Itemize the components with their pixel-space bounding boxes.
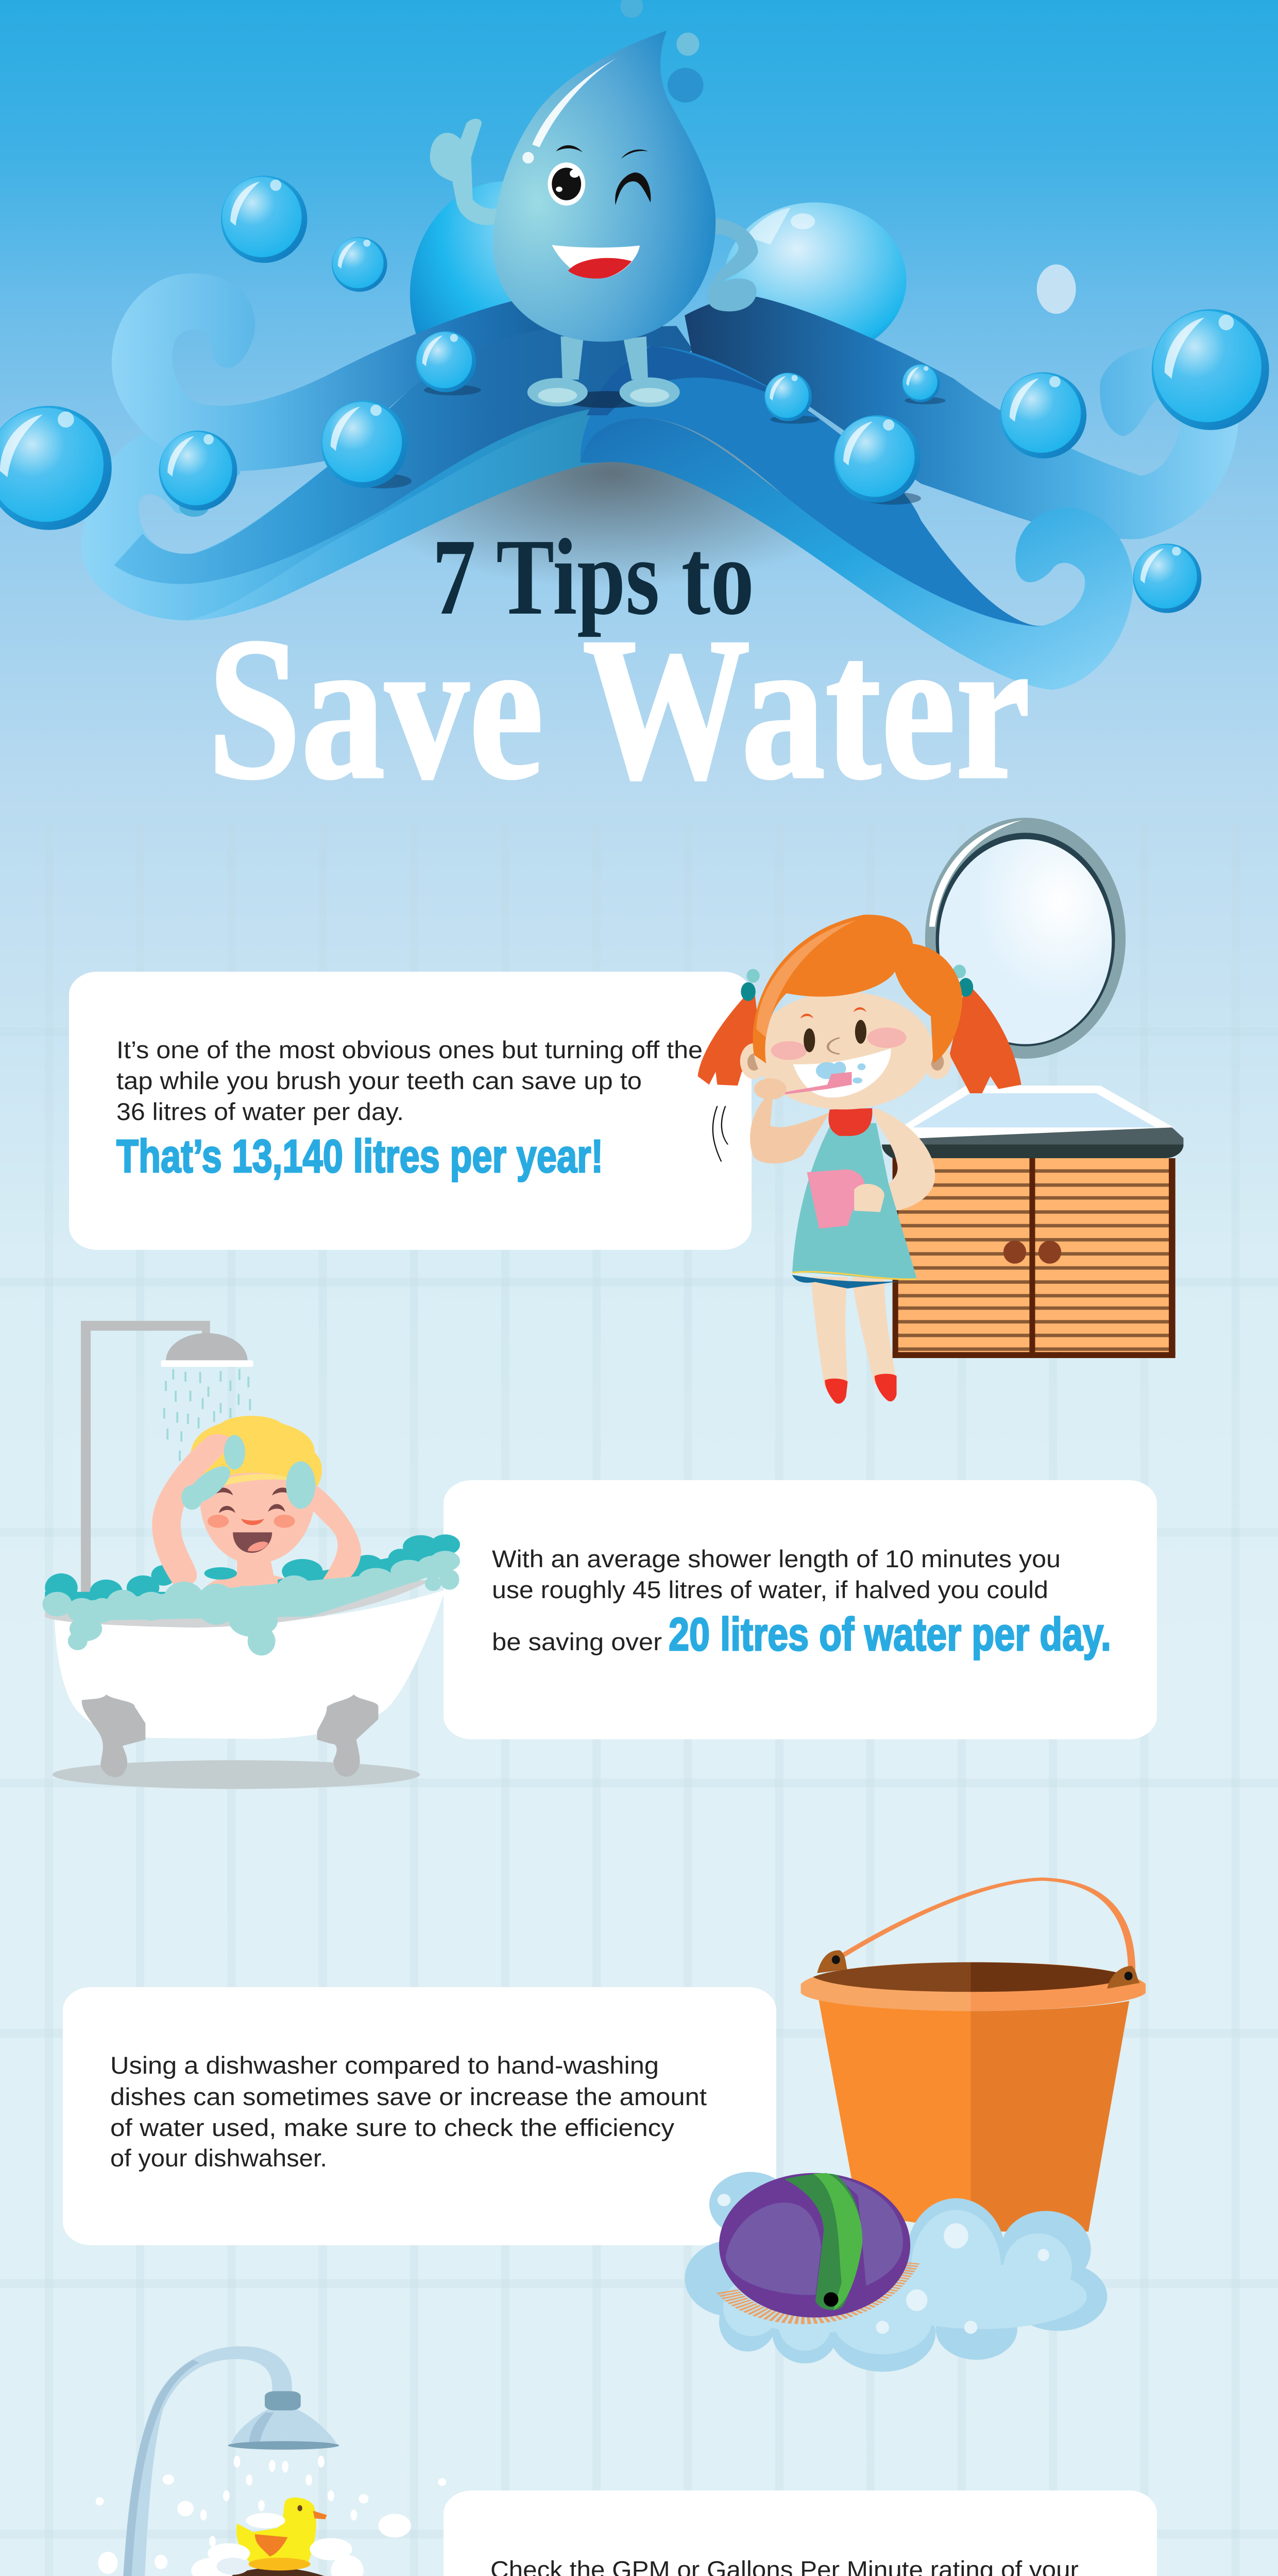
handle lug left — [817, 1950, 847, 1973]
left arm — [750, 1093, 830, 1163]
brush panels — [726, 2177, 903, 2295]
text: tip one: tap while you brush your teeth can save up to — [116, 1067, 642, 1094]
shower pipe and head — [81, 1321, 253, 1600]
dress — [792, 1123, 917, 1280]
curved shower pipe — [117, 2346, 292, 2576]
wall tiles — [0, 824, 1278, 2576]
bubbles — [0, 176, 1269, 613]
panel: card two — [444, 1480, 1157, 1739]
right arm — [854, 1108, 935, 1212]
hair — [202, 2568, 360, 2576]
foam — [685, 2172, 1107, 2372]
eyes and brows — [800, 1007, 866, 1052]
cabinet — [893, 1158, 1175, 1358]
handle lug right — [1107, 1966, 1140, 1989]
text: tip two: be saving over — [492, 1628, 662, 1655]
mouth — [552, 245, 640, 279]
scrubbing brush — [719, 2173, 910, 2319]
panel: card three — [63, 1987, 776, 2245]
left arm thumbs up — [430, 119, 501, 225]
shoes — [825, 1374, 897, 1404]
teeth and foam — [793, 1048, 891, 1097]
title line one: 7 Tips to — [432, 516, 754, 637]
bucket rim — [801, 1962, 1146, 2011]
bath feet — [82, 1694, 378, 1777]
boy — [191, 2568, 369, 2576]
shadow — [53, 1760, 420, 1789]
text: tip two: With an average shower length of 10 minutes you — [492, 1545, 1061, 1572]
girl — [697, 914, 1021, 1404]
big back bubbles — [410, 181, 907, 408]
hand on brush — [754, 1078, 787, 1099]
cheeks — [208, 1515, 295, 1528]
hero illustration: water drop on waves — [0, 0, 1269, 690]
text: tip one: 36 litres of water per day. — [116, 1098, 404, 1125]
front mid wave — [580, 346, 1043, 626]
illustration: child washing hair in tub — [42, 1321, 460, 1789]
upper left wave — [112, 274, 571, 471]
illustration: mirror, sink cabinet and girl brushing teeth — [697, 818, 1183, 1404]
text: tip two — [492, 1545, 1111, 1660]
bucket body — [819, 2000, 1129, 2231]
legs and feet — [527, 336, 680, 407]
text: tip three — [110, 2052, 707, 2172]
left eye — [548, 145, 585, 206]
rubber duck — [236, 2498, 327, 2570]
ears — [740, 1043, 951, 1079]
toothbrush — [766, 1072, 852, 1096]
collar — [828, 1108, 872, 1136]
cheeks — [771, 1027, 907, 1060]
upper right wave — [685, 297, 1239, 539]
bangs — [200, 1474, 294, 1493]
mirror — [925, 818, 1126, 1059]
panel: card one — [69, 972, 752, 1250]
highlight — [522, 58, 617, 163]
face — [754, 992, 933, 1110]
legs — [811, 1277, 897, 1388]
lower left wave outer band — [188, 400, 599, 620]
face — [200, 1473, 315, 1564]
bath rim — [45, 1580, 433, 1628]
lower left wave — [81, 329, 595, 620]
pale bubble — [1037, 264, 1076, 314]
brush body — [719, 2173, 910, 2317]
centre dark wave — [114, 326, 693, 584]
cup — [807, 1170, 864, 1229]
illustration: bucket and scrubbing brush with foam — [685, 1879, 1146, 2372]
lower right front wave — [581, 418, 1133, 690]
hand on cup — [854, 1184, 884, 1212]
counter — [882, 1127, 1183, 1158]
nose — [828, 1038, 840, 1054]
arms — [152, 1434, 361, 1592]
dark shadow under feet — [563, 391, 652, 408]
sink basin — [900, 1086, 1174, 1140]
drop body — [493, 30, 715, 342]
hole — [824, 2292, 839, 2307]
hair — [190, 1416, 322, 1497]
text: tip three: dishes can sometimes save or increase the amount — [110, 2083, 707, 2110]
panel: card four — [444, 2490, 1157, 2576]
handle — [838, 1879, 1132, 1971]
dark foam — [45, 1534, 460, 1608]
title — [208, 516, 1030, 821]
hair ties — [741, 964, 973, 1001]
bubble shadows — [354, 385, 945, 505]
hair — [753, 914, 962, 1063]
text: tip one — [116, 1036, 703, 1182]
pigtails — [697, 982, 1021, 1093]
water drop character — [430, 30, 758, 407]
text: tip two: use roughly 45 litres of water, if halved you could — [492, 1576, 1048, 1603]
title line two: Save Water — [208, 596, 1030, 821]
skirt underside — [792, 1275, 900, 1289]
text: tip three: of your dishwahser. — [110, 2144, 327, 2172]
arch shadow — [343, 358, 880, 589]
text: tip three: Using a dishwasher compared to hand-washing — [110, 2052, 659, 2079]
text: tip one: That’s 13,140 litres per year! — [116, 1131, 603, 1182]
light foam — [42, 1551, 460, 1655]
falling drops — [620, 0, 704, 103]
right arm on hip — [707, 218, 758, 311]
text: tip two: 20 litres of water per day. — [669, 1609, 1111, 1660]
hand foam — [178, 1435, 315, 1510]
water drops and small suds — [52, 2455, 533, 2576]
green stripe — [785, 2174, 861, 2310]
illustration: boy in bath with rubber duck — [0, 2346, 615, 2576]
mouth — [233, 1519, 272, 1553]
text: tip three: of water used, make sure to check the efficiency — [110, 2114, 675, 2141]
water spray — [164, 1369, 250, 1461]
bath body — [55, 1590, 446, 1739]
text: tip one: It’s one of the most obvious ones but turning off the — [116, 1036, 703, 1063]
bristles — [727, 2262, 909, 2319]
body — [196, 1555, 311, 1600]
eyes — [212, 1488, 293, 1513]
shower head — [228, 2391, 339, 2450]
motion lines — [713, 1106, 728, 1162]
winking eye — [615, 149, 651, 205]
suds on head — [187, 2513, 364, 2576]
